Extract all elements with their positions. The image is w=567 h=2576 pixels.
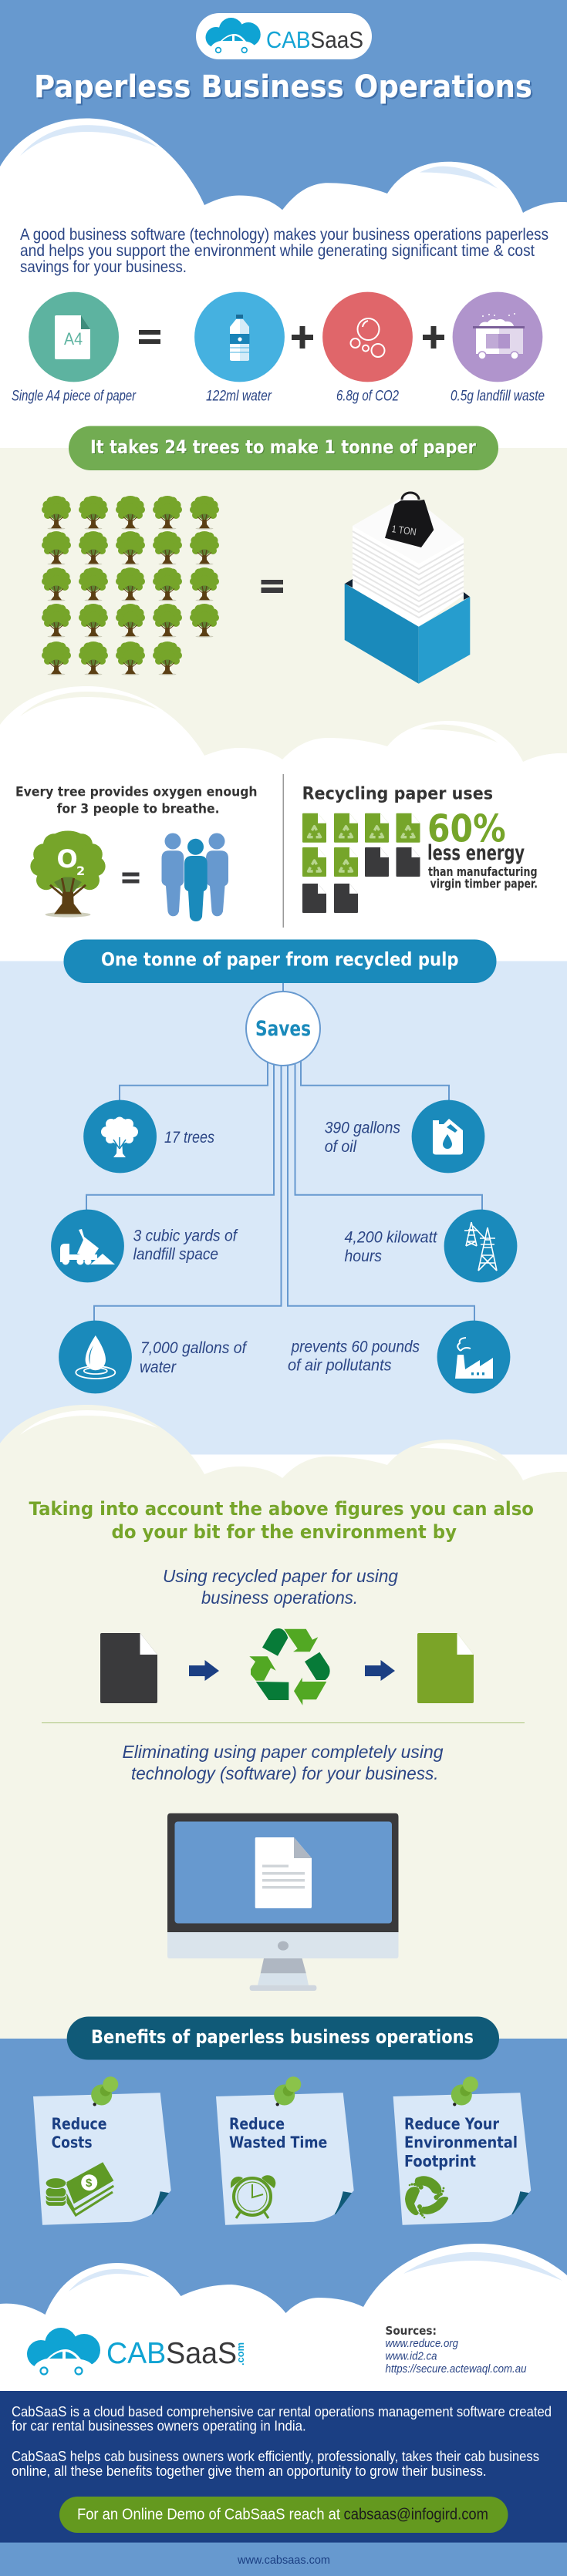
note: reduce environmental footprint: [393, 2076, 531, 2225]
cloud: footer: [0, 2244, 567, 2398]
note: reduce costs: $: [86, 2177, 93, 2190]
note: reduce environmental footprint: Environmental: [404, 2133, 518, 2152]
recycling heading: Recycling paper uses: [302, 784, 493, 803]
captions: 0.5g landfill waste: [451, 389, 545, 404]
text: prevents 60 pounds of air pollutants: [288, 1339, 420, 1375]
logo: footer: CABSaaS: [106, 2337, 237, 2370]
stat: 60% less energy: [427, 806, 538, 891]
captions: [12, 389, 545, 404]
panel: header background: [0, 0, 567, 231]
arrow: [189, 1660, 219, 1681]
cloud: your bit section top: [0, 1405, 567, 1559]
panel: your bit section body: [0, 1542, 567, 2039]
sources: Sources:: [386, 2324, 437, 2338]
note: reduce wasted time: Reduce: [229, 2115, 285, 2133]
text: using recycled paper: [163, 1566, 398, 1608]
captions: Single A4 piece of paper: [12, 389, 137, 404]
about text: CabSaaS helps cab business owners work efficiently, professionally, takes their cab business: [12, 2449, 539, 2464]
icon: desktop monitor: [167, 1813, 398, 1991]
connector lines: [86, 983, 482, 1323]
stat: 60% less energy: virgin timber paper.: [430, 876, 538, 891]
divider: [42, 1722, 525, 1723]
text: 7,000 gallons of water: 7,000 gallons of: [140, 1339, 248, 1357]
icon: dark document: [100, 1633, 157, 1703]
icon: landfill cart: [453, 292, 542, 382]
icon: water drop: [59, 1321, 132, 1393]
oxygen fact text: [15, 784, 258, 817]
logo: footer: .com: [235, 2342, 246, 2366]
icon: CO2 bubbles: [322, 292, 413, 382]
text: 4,200 kilowatt hours: [344, 1229, 438, 1265]
heading: do your bit: do your bit for the environment by: [111, 1521, 457, 1543]
heading pill: trees: [69, 426, 498, 470]
icon: green document: [417, 1633, 474, 1703]
note: reduce wasted time: Wasted Time: [229, 2133, 327, 2152]
equals sign: [122, 873, 139, 884]
logo: top pill: CABSaaS: [266, 26, 363, 53]
cloud: header: [0, 119, 567, 311]
note: reduce costs: Reduce: [52, 2115, 107, 2133]
heading: do your bit: [29, 1498, 534, 1543]
text: 4,200 kilowatt hours: 4,200 kilowatt: [344, 1229, 438, 1247]
panel: recycled pulp background: [0, 961, 567, 1454]
note: reduce environmental footprint: Reduce Your: [404, 2115, 499, 2133]
heading pill: benefits: [67, 2017, 499, 2060]
text: prevents 60 pounds of air pollutants: of air pollutants: [288, 1357, 392, 1375]
saves circle: Saves: [255, 1017, 311, 1041]
icon: power towers: [444, 1210, 517, 1282]
stat: 60% less energy: less energy: [427, 841, 525, 865]
icon: recycle symbol: [249, 1628, 330, 1706]
call to action pill: cabsaas@infogird.com: [344, 2507, 488, 2524]
document pictogram: 6 of 10 recycled: [302, 813, 420, 913]
heading: do your bit: Taking into account the above figures you can also: [29, 1498, 534, 1520]
about text: online, all these benefits together give them an opportunity to grow their business.: [12, 2463, 487, 2479]
text: 3 cubic yards of landfill space: landfill space: [133, 1246, 218, 1264]
sources: www.id2.ca: [386, 2350, 437, 2363]
saves circle: [246, 992, 320, 1066]
icon: factory: [437, 1321, 510, 1393]
logo: footer: [27, 2328, 246, 2376]
icon: oil can: [412, 1100, 484, 1173]
title: Paperless Business Operations: [34, 69, 532, 105]
heading pill: recycled pulp: One tonne of paper from recycled pulp: [101, 949, 458, 971]
oxygen fact text: Every tree provides oxygen enough: [15, 784, 258, 800]
text: 17 trees: 17 trees: [164, 1129, 214, 1147]
stat: 60% less energy: 60%: [427, 806, 506, 851]
plus sign: [423, 326, 444, 349]
icon: water bottle: [194, 292, 285, 382]
heading pill: recycled pulp: [63, 939, 497, 983]
icon: O2 tree: [30, 830, 106, 918]
note: reduce costs: [33, 2076, 171, 2225]
about text: [12, 2404, 552, 2479]
vertical divider: [282, 774, 284, 928]
sources: www.reduce.org: [386, 2337, 459, 2350]
footer url: www.cabsaas.com: [237, 2554, 330, 2567]
plus sign: [292, 326, 313, 349]
text: using recycled paper: Using recycled paper for using: [163, 1566, 398, 1586]
text: eliminating paper: Eliminating using paper completely using: [122, 1742, 444, 1762]
icon: dump truck: [51, 1210, 124, 1282]
call to action pill: [59, 2497, 508, 2533]
sources: https://secure.actewaql.com.au: [386, 2362, 527, 2376]
paper stack with 1 ton weight: [345, 493, 470, 684]
panel: trees section background: [0, 448, 567, 772]
tree grid: 24 trees: [42, 496, 219, 675]
text: eliminating paper: [122, 1742, 444, 1783]
text: 4,200 kilowatt hours: hours: [344, 1248, 382, 1265]
text: 7,000 gallons of water: water: [140, 1359, 177, 1376]
text: 3 cubic yards of landfill space: 3 cubic yards of: [133, 1227, 238, 1245]
captions: 6.8g of CO2: [336, 389, 399, 404]
text: 390 gallons of oil: [325, 1120, 400, 1156]
captions: 122ml water: [206, 389, 272, 404]
equals sign: [139, 330, 160, 344]
icon: A4 paper: A4: [64, 329, 83, 349]
heading pill: benefits: Benefits of paperless business operations: [91, 2026, 474, 2048]
text: 7,000 gallons of water: [140, 1339, 248, 1376]
logo: top pill: [196, 13, 372, 59]
text: eliminating paper: technology (software) for your business.: [131, 1763, 438, 1783]
icon: O2 tree: 2: [76, 864, 85, 878]
note: reduce wasted time: [216, 2076, 354, 2225]
heading pill: trees: It takes 24 trees to make 1 tonne of paper: [90, 436, 476, 458]
oxygen fact text: for 3 people to breathe.: [57, 802, 220, 817]
equals sign: [261, 580, 283, 593]
text: using recycled paper: business operations.: [201, 1588, 358, 1608]
sources: [386, 2324, 527, 2376]
text: 390 gallons of oil: of oil: [325, 1138, 357, 1156]
icon: A4 paper: [29, 292, 119, 382]
icon: O2 tree: O: [57, 844, 78, 874]
panel: footer bar: [0, 2543, 567, 2576]
note: reduce costs: Costs: [52, 2133, 93, 2152]
intro text: [20, 226, 548, 276]
text: 390 gallons of oil: 390 gallons: [325, 1120, 400, 1137]
intro text: and helps you support the environment while generating significant time & cost: [20, 242, 535, 260]
intro text: savings for your business.: [20, 258, 187, 276]
text: 3 cubic yards of landfill space: [133, 1227, 238, 1264]
text: prevents 60 pounds of air pollutants: prevents 60 pounds: [291, 1339, 420, 1356]
stat: 60% less energy: than manufacturing: [428, 864, 537, 879]
panel: about: [0, 2391, 567, 2543]
icon: three people: [162, 833, 228, 921]
about text: for car rental businesses owners operating in India.: [12, 2419, 306, 2434]
panel: benefits background: [0, 2039, 567, 2393]
arrow: [365, 1660, 395, 1681]
cloud: trees section bottom: [0, 686, 567, 840]
call to action pill: For an Online Demo of CabSaaS reach at: [77, 2507, 340, 2524]
paper stack with 1 ton weight: 1 TON: [391, 523, 417, 537]
icon: tree saved: [83, 1100, 157, 1173]
note: reduce environmental footprint: Footprint: [404, 2152, 476, 2170]
